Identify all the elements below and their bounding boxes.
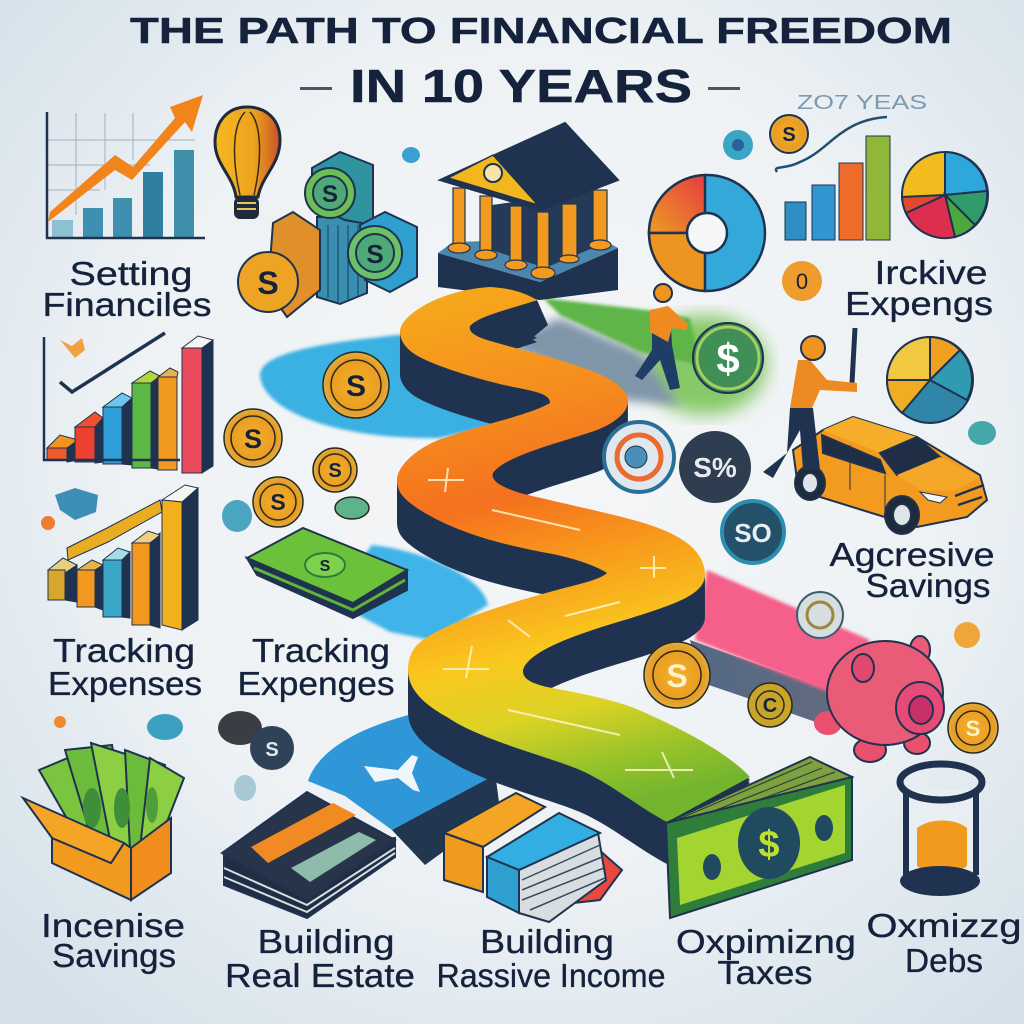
person with stick [763,328,857,478]
icon: percent coin: S% [693,452,737,483]
coins: near piggy bank: S [666,658,688,694]
icon: coin stacks: S [322,181,338,208]
chart: top right bars: ZO7 YEAS [797,92,927,114]
labels: tracking expenges [238,632,394,702]
chart: pie top right [902,152,988,238]
label: setting financiles: Setting [70,255,192,292]
coins: near piggy bank: C [763,695,777,717]
icon: small figures left [41,488,98,530]
label: building real estate: Building [258,923,394,960]
label: oxpimizng taxes: Oxpimizng [676,923,856,960]
label: agcresive savings: Savings [866,567,990,604]
chart: donut [649,175,765,291]
icon: small coins top right [723,115,822,301]
coins: middle left: S [244,424,262,454]
blue trail lower with plane [308,714,500,865]
pink trail [690,570,870,727]
label: trckive expengs: Irckive [874,254,988,291]
icon: dark book with cards [222,792,395,918]
label: oxmizzg debs [866,907,1022,979]
icon: target circle [604,422,674,492]
icon: banknotes [666,757,852,918]
labels: tracking expenses: Tracking [53,632,195,669]
road: winding path to financial freedom [397,287,750,864]
icon: small stones: S [265,739,279,761]
label: building rassive income: Building [480,923,614,960]
icon: banknotes: $ [758,824,780,866]
label: oxmizzg debs: Oxmizzg [866,907,1022,944]
icon: so coin [722,501,784,563]
title [130,10,952,112]
icon: coin stacks [238,152,417,317]
icon: coin stacks: S [366,239,384,269]
icon: small coins top right: S [782,124,796,146]
label: incenise savings: Savings [52,937,176,974]
coins: middle left: S [270,489,286,515]
coin: green dollar [693,323,763,393]
labels: tracking expenges: Tracking [252,632,390,669]
icon: coin stacks: S [257,265,279,301]
chart: colorful rising bars [44,333,213,473]
icon: car [793,417,987,534]
labels: tracking expenges: Expenges [238,665,394,702]
person walking [635,284,688,390]
small speck icon [402,147,420,163]
blue trail upper [260,332,520,438]
label: building rassive income: Rassive Income [436,957,666,994]
label: setting financiles [42,255,212,323]
green trail [495,298,767,415]
label: incenise savings [41,907,185,974]
icon: piggy bank [814,636,944,762]
icon: hourglass [900,764,982,896]
label: building real estate [225,923,415,994]
title: IN 10 YEARS [350,60,692,112]
label: trckive expengs: Expengs [845,285,993,322]
label: building real estate: Real Estate [225,957,415,994]
coins: middle left [222,352,389,532]
coins: near piggy bank [644,622,998,753]
labels: tracking expenses [48,632,202,702]
coins: near piggy bank: S [966,716,980,741]
labels: tracking expenses: Expenses [48,665,202,702]
coins: middle left: S [346,370,366,403]
bank building [438,123,618,300]
label: agcresive savings: Agcresive [830,536,994,573]
icon: small teal right [968,421,996,445]
icon: small coin on pink trail [797,592,843,638]
coins: middle left: S [328,460,342,482]
icon: light bulb [215,107,280,219]
icon: cash stack: S [320,558,331,575]
chart: growth with arrow [47,95,205,238]
coin: green dollar: $ [716,335,740,382]
chart: pie right [887,337,973,423]
chart: top right bars [776,92,927,240]
chart: yellow rising bars with arrow [48,485,198,630]
label: trckive expengs [845,254,993,322]
icon: cash stack [247,528,407,618]
icon: percent coin [679,431,751,503]
icon: small stones [54,711,294,801]
icon: so coin: SO [734,518,772,548]
label: agcresive savings [830,536,994,604]
label: setting financiles: Financiles [42,286,212,323]
label: oxpimizng taxes: Taxes [718,954,812,991]
blue trail middle [330,545,488,640]
icon: stack of books [444,793,622,922]
icon: box with cash [23,743,184,900]
label: building rassive income [436,923,666,994]
title: THE PATH TO FINANCIAL FREEDOM [130,10,952,51]
label: oxpimizng taxes [676,923,856,991]
icon: small coins top right: 0 [796,269,808,294]
label: oxmizzg debs: Debs [905,942,983,979]
label: incenise savings: Incenise [41,907,185,944]
